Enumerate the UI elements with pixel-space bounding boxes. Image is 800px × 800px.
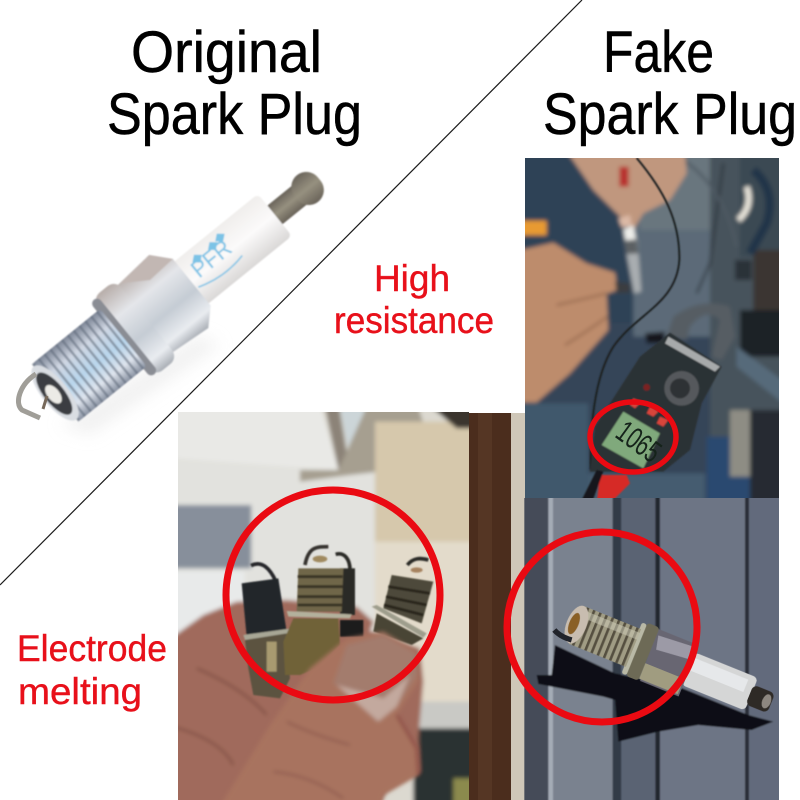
ground electrode bbox=[18, 374, 40, 418]
gasket bbox=[92, 280, 178, 376]
heading: fake bbox=[543, 20, 797, 147]
clamp meter body bbox=[590, 333, 722, 472]
brown post between photos bbox=[469, 413, 525, 800]
label: high resistance bbox=[334, 258, 494, 341]
terminal bbox=[265, 182, 311, 226]
insulator bbox=[166, 194, 292, 310]
photo: high resistance multimeter test bbox=[525, 158, 779, 498]
heading: original: Original bbox=[131, 20, 322, 85]
melted plugs bbox=[242, 547, 433, 698]
label: electrode melting: melting bbox=[18, 671, 142, 712]
callout: melted electrodes circle bbox=[226, 490, 440, 700]
hex nut bbox=[112, 245, 221, 358]
callout: burnt plug circle bbox=[507, 532, 697, 722]
shell mouth bbox=[24, 358, 86, 428]
callout: meter reading circle bbox=[590, 402, 676, 472]
photo: fake plug on dark plastic bbox=[524, 498, 779, 800]
label: high resistance: High bbox=[374, 258, 450, 299]
label: electrode melting: Electrode bbox=[17, 628, 167, 669]
fake plug body bbox=[564, 606, 774, 712]
meter reading: 1065 bbox=[610, 414, 667, 469]
threads bbox=[32, 309, 147, 422]
heading: original bbox=[107, 20, 362, 147]
burnt electrode bbox=[554, 630, 572, 640]
heading: fake: Fake bbox=[603, 20, 714, 85]
photo: electrode melting hand holding plugs bbox=[178, 412, 469, 800]
label: electrode melting bbox=[17, 628, 167, 712]
test cable bbox=[591, 158, 679, 470]
diagonal divider bbox=[0, 0, 582, 585]
label: high resistance: resistance bbox=[334, 300, 494, 341]
heading: original: Spark Plug bbox=[107, 82, 362, 147]
plug shadow bbox=[60, 335, 220, 435]
original spark plug bbox=[13, 140, 351, 440]
brand mark: PFR bbox=[186, 235, 237, 283]
